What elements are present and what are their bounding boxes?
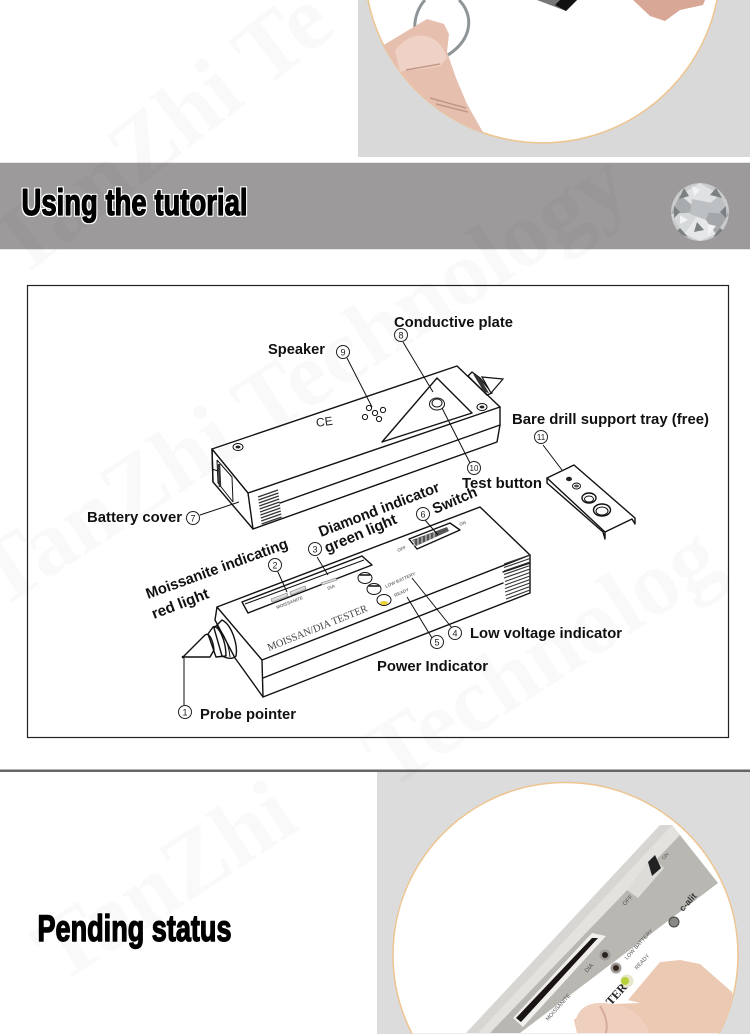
switch bbox=[409, 523, 460, 549]
panel: bottom photo bbox=[377, 772, 750, 1034]
photo: tester in hand: MOISSANITE bbox=[545, 993, 572, 1022]
part labels: Bare drill support tray (free) bbox=[512, 411, 709, 428]
part labels: Power Indicator bbox=[377, 658, 488, 675]
photo: tester in hand: c-alit bbox=[677, 891, 699, 913]
callout numbers: 1 bbox=[182, 708, 188, 718]
vent bbox=[258, 490, 282, 524]
printed labels: MOISSANITE bbox=[276, 595, 304, 610]
header band bbox=[0, 162, 750, 250]
display bbox=[513, 933, 606, 1027]
watermarks: TanZhi bbox=[15, 759, 313, 1002]
callout numbers: 11 bbox=[537, 433, 546, 442]
callout numbers: 2 bbox=[272, 560, 278, 570]
photo: tester in hand: DIA bbox=[584, 963, 595, 974]
device: lower (front view): ON bbox=[459, 520, 467, 527]
device: lower (front view): LOW BATTERY bbox=[384, 571, 416, 589]
part labels: Low voltage indicator bbox=[470, 625, 622, 642]
device: lower (front view): OFF bbox=[397, 545, 407, 553]
speaker holes bbox=[362, 405, 386, 422]
screws bbox=[233, 444, 243, 450]
device: lower (front view): READY bbox=[393, 587, 410, 598]
upper probe bbox=[468, 372, 492, 395]
photo: tester in hand: LOW BATTERY bbox=[624, 928, 655, 961]
lamps bbox=[600, 950, 610, 960]
photo: tester in hand: TER bbox=[603, 980, 630, 1008]
callout numbers: 3 bbox=[312, 544, 318, 554]
lower probe bbox=[214, 620, 236, 658]
logo bbox=[669, 917, 679, 927]
part labels: Speaker bbox=[268, 341, 325, 358]
icon: diamond bbox=[671, 183, 729, 241]
conductive plate bbox=[382, 378, 472, 442]
display slot bbox=[242, 556, 372, 613]
device: lower (front view): MOISSAN/DIA TESTER bbox=[266, 603, 369, 654]
photo: tester in hand bbox=[466, 825, 740, 1033]
callout numbers bbox=[178, 328, 548, 718]
device: upper (back view) bbox=[212, 366, 503, 529]
printed text: OFF bbox=[622, 894, 635, 907]
leader lines bbox=[184, 342, 562, 705]
part labels: Probe pointer bbox=[200, 706, 296, 723]
photo: tester in hand: ON bbox=[661, 851, 671, 861]
indicator lamps bbox=[358, 572, 372, 584]
callout numbers: 8 bbox=[398, 330, 404, 340]
part labels: green light bbox=[322, 511, 399, 557]
part labels: Conductive plate bbox=[394, 314, 513, 331]
part labels: red light bbox=[149, 585, 211, 623]
part labels bbox=[87, 314, 709, 723]
switch bbox=[627, 862, 664, 898]
heading: pending status: Pending status bbox=[38, 908, 232, 949]
part labels: Battery cover bbox=[87, 509, 182, 526]
photo: tester in hand: READY bbox=[634, 953, 651, 971]
panel: top photo bbox=[358, 0, 750, 157]
part labels: Moissanite indicating bbox=[144, 535, 290, 603]
callout numbers: 10 bbox=[470, 464, 479, 473]
callout numbers: 5 bbox=[434, 638, 440, 648]
photo: hand holding ring bbox=[384, 0, 705, 133]
callout numbers: 4 bbox=[452, 628, 458, 638]
device: lower (front view) bbox=[182, 507, 530, 697]
part labels: Switch bbox=[430, 484, 480, 518]
title: using the tutorial: Using the tutorial bbox=[22, 182, 248, 223]
right vent bbox=[504, 555, 530, 599]
callout numbers: 9 bbox=[340, 348, 346, 358]
panel: diagram bbox=[28, 286, 728, 738]
part labels: Test button bbox=[462, 475, 542, 492]
device: lower (front view): DIA bbox=[327, 583, 336, 591]
callout numbers: 6 bbox=[420, 510, 426, 520]
divider bbox=[0, 770, 750, 772]
watermarks: Technolog bbox=[345, 503, 737, 807]
callout numbers: 7 bbox=[190, 514, 196, 524]
part labels: Diamond indicator bbox=[316, 479, 442, 541]
tray bbox=[547, 465, 635, 539]
CE mark: CE bbox=[315, 414, 334, 430]
hand bbox=[574, 960, 740, 1033]
